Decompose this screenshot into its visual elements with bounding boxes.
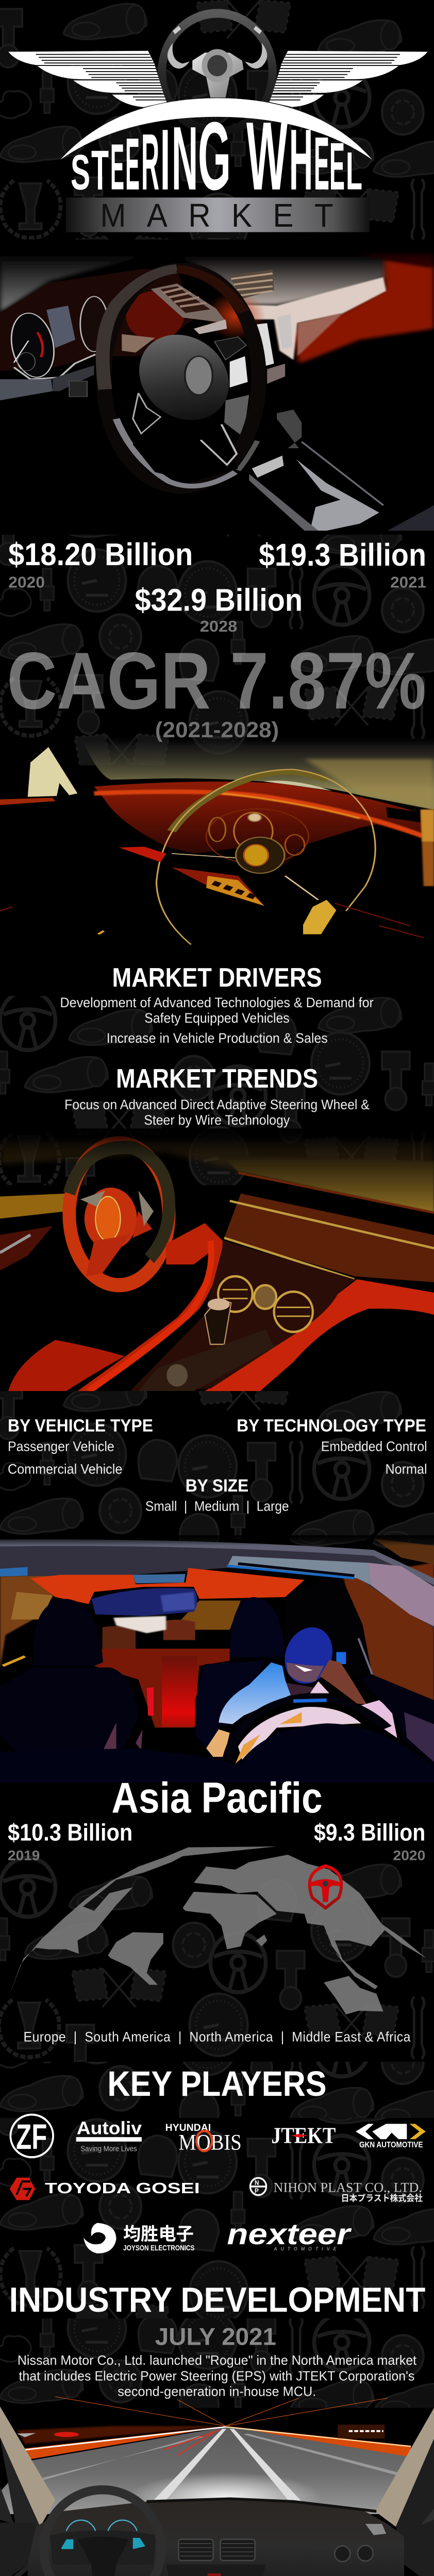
- photo: vintage dashboard: [0, 735, 434, 944]
- logo: hyundai mobis: HYUNDAI: [165, 2123, 211, 2133]
- section: industry development text: [18, 2323, 417, 2399]
- title: steering wheel: S: [71, 145, 90, 200]
- logo: joyson electronics: [84, 2223, 195, 2253]
- woman: [206, 1581, 397, 1764]
- air vents: [151, 270, 274, 334]
- trend text: Steer by Wire Technology: [144, 1113, 290, 1128]
- title: steering wheel: E: [314, 122, 329, 206]
- date: JULY 2021: [155, 2323, 276, 2350]
- stat 2021: 2021: [390, 574, 426, 591]
- regional stats: [8, 1820, 425, 1863]
- centre stack: [257, 323, 274, 366]
- logo: hyundai mobis: [165, 2123, 242, 2155]
- icon: right wing: [269, 51, 428, 107]
- logo: joyson electronics: 均胜电子: [123, 2225, 194, 2244]
- background pattern: key players: [0, 1858, 434, 2343]
- title: steering wheel: E: [125, 123, 140, 206]
- steering wheel: [44, 2490, 161, 2576]
- logo: nexteer: AUTOMOTIVE: [274, 2246, 337, 2251]
- stat 2020: 2020: [8, 574, 45, 591]
- logo: nihon plast: P: [255, 2187, 259, 2195]
- photo: car dashboard with steering wheel: [0, 242, 434, 531]
- background pattern: header: [0, 0, 434, 240]
- logo: nihon plast: NIHON PLAST CO., LTD.: [274, 2180, 422, 2195]
- rear seats: [94, 1649, 230, 1727]
- gear console: [249, 410, 434, 531]
- horn hub: [236, 837, 285, 873]
- wheel hub: [128, 329, 246, 481]
- segment: technology type: Normal: [385, 1462, 427, 1477]
- icon: steering wheel: [162, 13, 273, 131]
- driver seat: [195, 1597, 285, 1752]
- logo: jtekt: JTEKT: [271, 2123, 336, 2148]
- logo: autoliv: Autoliv: [77, 2118, 142, 2139]
- logo: nihon plast: [250, 2178, 423, 2204]
- logo: autoliv: Saving More Lives: [80, 2144, 137, 2153]
- red ceiling: [30, 1568, 305, 1604]
- logo: joyson electronics: JOYSON ELECTRONICS: [123, 2244, 195, 2252]
- driver list: [60, 995, 374, 1046]
- photo: red luxury interior: [0, 1128, 434, 1391]
- title: steering wheel: G: [198, 101, 231, 210]
- title: steering wheel: W: [246, 101, 288, 210]
- title: steering wheel: I: [160, 112, 170, 208]
- background pattern: segments: [0, 1372, 434, 1647]
- stat 2028: 2028: [200, 618, 237, 635]
- background pattern: july section: [0, 2318, 434, 2521]
- segment: technology type: BY TECHNOLOGY TYPE: [237, 1416, 426, 1436]
- description: second-generation in-house MCU.: [118, 2384, 316, 2399]
- vents: [178, 2539, 373, 2562]
- trend text: Focus on Advanced Direct Adaptive Steering Wheel &: [64, 1097, 370, 1112]
- old steering wheel: [156, 769, 375, 944]
- illustration: car cockpit on highway: [0, 2397, 434, 2576]
- description: [18, 2353, 417, 2399]
- stat 2020: $18.20 Billion: [8, 537, 193, 572]
- title: steering wheel: T: [91, 139, 109, 201]
- segment: size: [145, 1476, 289, 1514]
- driver list: Increase in Vehicle Production & Sales: [107, 1031, 328, 1046]
- segment: vehicle type: BY VEHICLE TYPE: [8, 1416, 153, 1436]
- heading: key players: KEY PLAYERS: [107, 2064, 327, 2104]
- lower trim: [14, 354, 95, 379]
- section: key players: [9, 2030, 426, 2319]
- heading: market drivers: MARKET DRIVERS: [112, 962, 322, 992]
- section: market drivers: [60, 962, 374, 1128]
- region list: Europe | South America | North America | Middle East & Africa: [24, 2030, 411, 2045]
- title: steering wheel: R: [141, 117, 159, 207]
- title: steering wheel: E: [329, 129, 345, 204]
- segment: size: Small | Medium | Large: [145, 1499, 289, 1514]
- segment: size: BY SIZE: [186, 1476, 248, 1496]
- arch above title: [60, 98, 372, 160]
- seat: [8, 1340, 125, 1391]
- logo: nihon plast: 日本プラスト株式会社: [341, 2193, 423, 2204]
- rear view mirror: [91, 1588, 197, 1616]
- subtitle bar: market: MARKET: [100, 197, 333, 234]
- steering wheel rim: [103, 268, 259, 489]
- stat 2020: $9.3 Billion: [314, 1820, 425, 1846]
- logo: autoliv: [76, 2118, 142, 2153]
- driver list: Safety Equipped Vehicles: [144, 1011, 290, 1026]
- driver list: Development of Advanced Technologies & Demand for: [60, 995, 374, 1010]
- icon: left wing: [8, 51, 166, 107]
- hazard button: [208, 2573, 221, 2576]
- road scene: [0, 2397, 434, 2522]
- segment: technology type: [237, 1416, 427, 1477]
- stat 2021: [259, 538, 426, 591]
- stat 2019: 2019: [8, 1848, 40, 1863]
- segment: vehicle type: Passenger Vehicle: [8, 1439, 114, 1454]
- stat 2019: [8, 1820, 132, 1863]
- photo: woman in car at night: [0, 1535, 434, 1783]
- background pattern: market size: [0, 498, 434, 773]
- stat 2028: $32.9 Billion: [135, 583, 303, 618]
- heading: industry development: INDUSTRY DEVELOPMENT: [9, 2280, 425, 2319]
- dashboard: [28, 2499, 404, 2576]
- stat 2028: [135, 583, 303, 635]
- map: world globe: [8, 1846, 426, 2014]
- dome light: [113, 1616, 166, 1633]
- roof: [0, 1542, 434, 1628]
- title: steering wheel: N: [172, 108, 198, 209]
- logo: zf: ZF: [16, 2117, 47, 2157]
- cagr: (2021-2028): [155, 718, 279, 742]
- centre panel and vents: [130, 1241, 354, 1391]
- description: Nissan Motor Co., Ltd. launched "Rogue" in the North America market: [18, 2353, 417, 2368]
- right red trim: [205, 1279, 434, 1391]
- description: that includes Electric Power Steering (EPS) with JTEKT Corporation's: [19, 2369, 414, 2384]
- centre console: [155, 2565, 266, 2576]
- icon: steering wheel location pin: [310, 1866, 341, 1908]
- windshield pillars and doors: [0, 2406, 434, 2576]
- stats block: market size: [7, 537, 426, 742]
- title: steering wheel: L: [346, 142, 362, 201]
- segment: vehicle type: Commercial Vehicle: [8, 1462, 122, 1477]
- logo: gkn automotive: GKN AUTOMOTIVE: [359, 2141, 423, 2149]
- logo: toyoda gosei: [10, 2178, 200, 2200]
- red dashboard curve and console: [77, 1223, 223, 1391]
- segment: vehicle type: [8, 1416, 153, 1477]
- steering wheel: [69, 1143, 169, 1285]
- segment: technology type: Embedded Control: [321, 1439, 427, 1454]
- logo: hyundai mobis: MOBIS: [178, 2130, 242, 2155]
- background pattern: regional: [0, 1858, 434, 2083]
- dash surfaces: [0, 257, 133, 313]
- trend text: [64, 1097, 370, 1128]
- heading: market trends: MARKET TRENDS: [116, 1064, 318, 1093]
- background pattern: drivers and trends: [0, 991, 434, 1216]
- red panel and badge: [119, 846, 166, 862]
- title: steering wheel: H: [289, 112, 313, 208]
- logo: gkn automotive: [356, 2124, 426, 2149]
- stat 2020: [8, 537, 193, 591]
- logo: nihon plast: N: [255, 2179, 259, 2187]
- heading: asia pacific: Asia Pacific: [111, 1774, 323, 1822]
- passenger seat: [0, 1599, 138, 1752]
- door and steering wheel: [360, 1675, 434, 1766]
- logo: toyoda gosei: TOYODA GOSEI: [45, 2180, 200, 2196]
- stat 2020: [314, 1820, 425, 1863]
- stat 2019: $10.3 Billion: [8, 1820, 132, 1846]
- logo: wings and steering wheel emblem: [8, 13, 428, 160]
- stat 2020: 2020: [393, 1848, 425, 1863]
- title: steering wheel: E: [110, 130, 124, 204]
- outside and cabin: [343, 1563, 434, 1704]
- stat 2021: $19.3 Billion: [259, 538, 426, 572]
- section: segmentation: [8, 1416, 427, 1514]
- logo: nexteer: nexteer: [227, 2217, 352, 2250]
- instrument cluster: [7, 296, 108, 379]
